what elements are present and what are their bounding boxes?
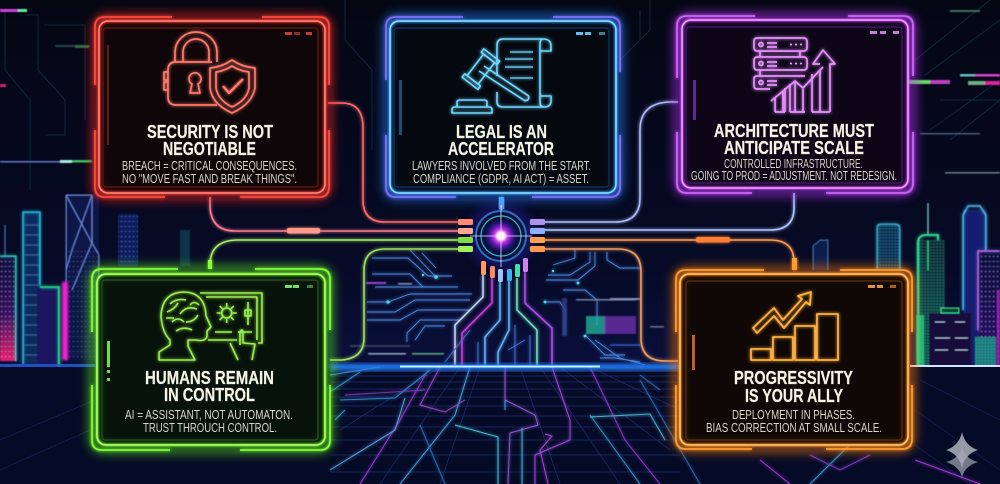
heading: legal: ACCELERATOR bbox=[448, 139, 554, 159]
panel: legal bbox=[386, 17, 620, 197]
building: teal dotted tower bbox=[916, 203, 945, 366]
text: humans body: TRUST THROUCH CONTROL. bbox=[143, 421, 277, 435]
panel: architecture bbox=[677, 16, 913, 193]
text: security body: BREACH = CRITICAL CONSEQUENCES. bbox=[122, 159, 297, 173]
icon: padlock and shield bbox=[164, 32, 255, 113]
text: architecture body: CONTROLLED INFRASTRUCTURE. bbox=[724, 157, 863, 171]
horizon glow line bbox=[0, 364, 1000, 370]
text: legal body bbox=[412, 159, 591, 186]
icon: gavel and scroll bbox=[452, 39, 551, 113]
building: lattice tower bbox=[62, 195, 99, 360]
text: humans body bbox=[125, 408, 293, 435]
icon: servers and growth chart bbox=[754, 38, 835, 112]
central hub bbox=[458, 202, 545, 282]
building: pink tower bbox=[0, 225, 16, 361]
trace end dots bbox=[386, 270, 586, 337]
connector: green upper bbox=[208, 240, 470, 269]
watermark star bbox=[946, 432, 978, 477]
heading: humans: IN CONTROL bbox=[164, 385, 255, 405]
panel: humans bbox=[92, 269, 330, 450]
faint background circuit traces bbox=[5, 0, 1000, 190]
text: humans body: AI = ASSISTANT, NOT AUTOMATON. bbox=[125, 408, 293, 422]
building: teal low block bbox=[975, 337, 996, 366]
building: striped cyan tower bbox=[23, 212, 41, 364]
city skyline right bbox=[813, 175, 1000, 366]
connector: purple bottom bbox=[530, 193, 794, 230]
hub connector pads right bbox=[530, 219, 545, 252]
connector: orange upper bbox=[530, 237, 797, 270]
hub connector pads bottom bbox=[481, 258, 528, 282]
panel: progressivity bbox=[676, 270, 912, 449]
floor circuit traces bbox=[330, 367, 980, 484]
connector: purple left bbox=[530, 102, 678, 222]
data noise strips bbox=[350, 282, 664, 355]
small buildings behind panels bbox=[118, 214, 192, 266]
building: purple dotted tower bbox=[978, 250, 1000, 366]
hub circuit lines to horizon bbox=[445, 272, 552, 365]
heading: architecture: ANTICIPATE SCALE bbox=[724, 138, 864, 158]
icon: growth bars and arrow bbox=[751, 292, 838, 360]
connector: blue bbox=[499, 197, 504, 235]
text: architecture body bbox=[691, 157, 897, 183]
icon: human head and control screen bbox=[159, 292, 262, 360]
heading: security bbox=[147, 122, 273, 159]
heading: humans bbox=[145, 368, 274, 405]
heading: security: NEGOTIABLE bbox=[163, 139, 256, 159]
heading: humans: HUMANS REMAIN bbox=[145, 368, 274, 388]
heading: legal bbox=[448, 122, 554, 159]
heading: architecture: ARCHITECTURE MUST bbox=[714, 121, 874, 141]
city skyline left bbox=[0, 195, 192, 366]
building: spire tower bbox=[963, 175, 986, 366]
building: distant teal tower bbox=[813, 224, 928, 270]
text: security body: NO "MOVE FAST AND BREAK THINGS". bbox=[122, 172, 297, 186]
heading: security: SECURITY IS NOT bbox=[147, 122, 273, 142]
text: legal body: LAWYERS INVOLVED FROM THE START. bbox=[412, 159, 591, 173]
text: security body bbox=[122, 159, 297, 186]
hub connector pads left bbox=[458, 219, 473, 252]
panel: security bbox=[95, 17, 329, 197]
connector: orange lower bbox=[530, 249, 678, 361]
connector: red bottom bbox=[210, 197, 470, 234]
text: progressivity body: BIAS CORRECTION AT SMALL SCALE. bbox=[706, 421, 882, 435]
heading: progressivity: IS YOUR ALLY bbox=[745, 386, 843, 406]
text: legal body: COMPLIANCE (GDPR, AI ACT) = ASSET. bbox=[413, 172, 589, 186]
building: dark data block bbox=[929, 308, 971, 366]
text: progressivity body bbox=[706, 408, 882, 435]
heading: progressivity bbox=[734, 368, 853, 406]
connector: green lower bbox=[330, 249, 470, 360]
heading: progressivity: PROGRESSIVITY bbox=[734, 368, 853, 388]
building: green edged block bbox=[37, 287, 59, 366]
connector: red top-right bbox=[328, 103, 470, 222]
heading: architecture bbox=[714, 121, 874, 158]
upper circuit board traces bbox=[367, 250, 645, 365]
text: architecture body: GOING TO PROD = ADJUSTMENT. NOT REDESIGN. bbox=[691, 169, 897, 183]
floor grid bbox=[0, 367, 1000, 484]
text: progressivity body: DEPLOYMENT IN PHASES. bbox=[732, 408, 855, 422]
heading: legal: LEGAL IS AN bbox=[456, 122, 547, 142]
